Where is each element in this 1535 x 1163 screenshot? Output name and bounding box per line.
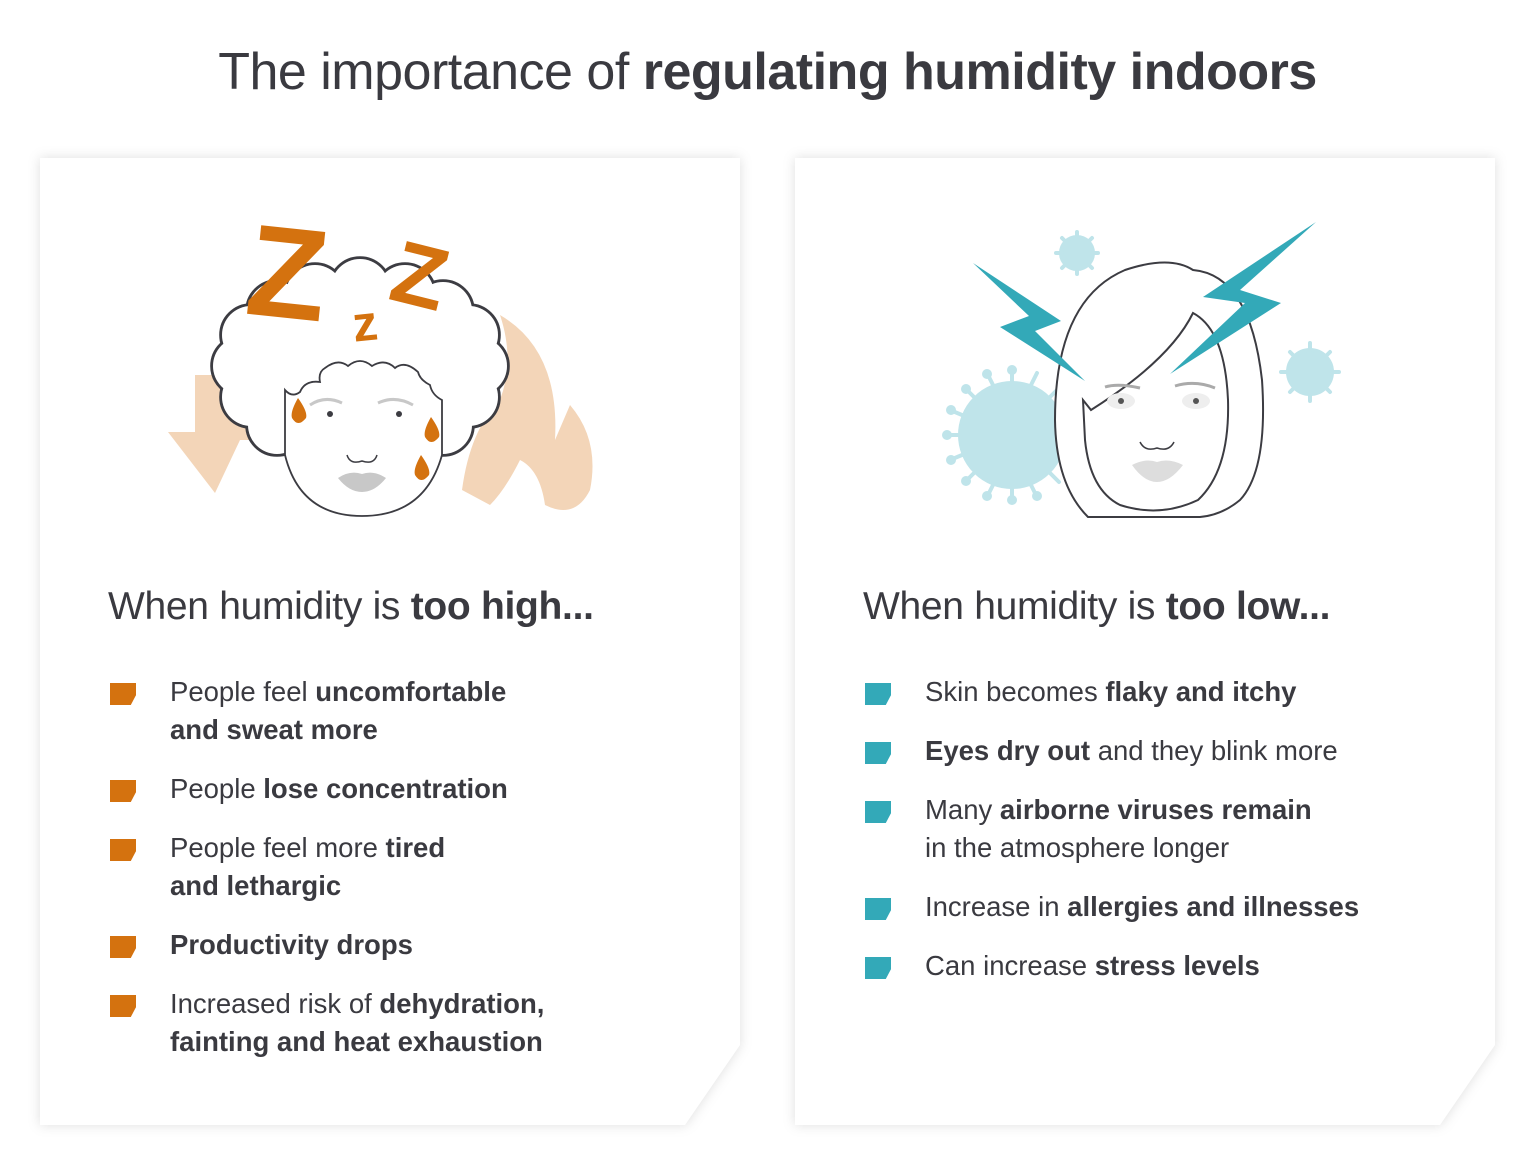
title: The importance of regulating humidity indoors	[218, 43, 1317, 101]
icon: down arrow	[168, 375, 250, 493]
lightning	[973, 263, 1085, 381]
hair	[1055, 262, 1263, 517]
list: too low effects: Many airborne viruses remain	[925, 794, 1312, 825]
sweat drops	[292, 398, 439, 480]
list: too high effects: People feel more tired	[170, 832, 445, 863]
Zzz: Z	[240, 196, 335, 349]
hair	[212, 258, 508, 474]
list: too high effects: People lose concentration	[170, 773, 508, 804]
list: too high effects: Increased risk of dehydration,	[170, 988, 544, 1019]
list: too high effects: and lethargic	[170, 870, 341, 901]
list: too low effects: Can increase stress levels	[925, 950, 1260, 981]
viruses	[942, 232, 1339, 505]
list: too low effects: Skin becomes flaky and itchy	[925, 676, 1296, 707]
heading: too low: When humidity is too low...	[863, 585, 1330, 628]
list: too low effects: Increase in allergies and illnesses	[925, 891, 1359, 922]
list: too high effects	[110, 676, 544, 1057]
list: too low effects	[865, 676, 1359, 981]
panel: too high	[36, 154, 744, 1129]
list: too low effects: in the atmosphere longer	[925, 832, 1229, 863]
Zzz: Z	[382, 221, 458, 330]
icon: hot sleepy face	[168, 196, 592, 516]
icon: dry stressed face	[942, 222, 1339, 517]
list: too high effects: fainting and heat exhaustion	[170, 1026, 543, 1057]
Zzz: z	[349, 294, 380, 353]
icon: flame	[462, 315, 592, 510]
list: too high effects: and sweat more	[170, 714, 378, 745]
Zzz	[240, 196, 458, 353]
heading: too high: When humidity is too high...	[108, 585, 594, 628]
panel: too low	[791, 154, 1499, 1129]
list: too high effects: People feel uncomfortable	[170, 676, 506, 707]
face	[285, 361, 442, 516]
list: too low effects: Eyes dry out and they blink more	[925, 735, 1338, 766]
list: too high effects: Productivity drops	[170, 929, 413, 960]
face	[1083, 313, 1228, 510]
